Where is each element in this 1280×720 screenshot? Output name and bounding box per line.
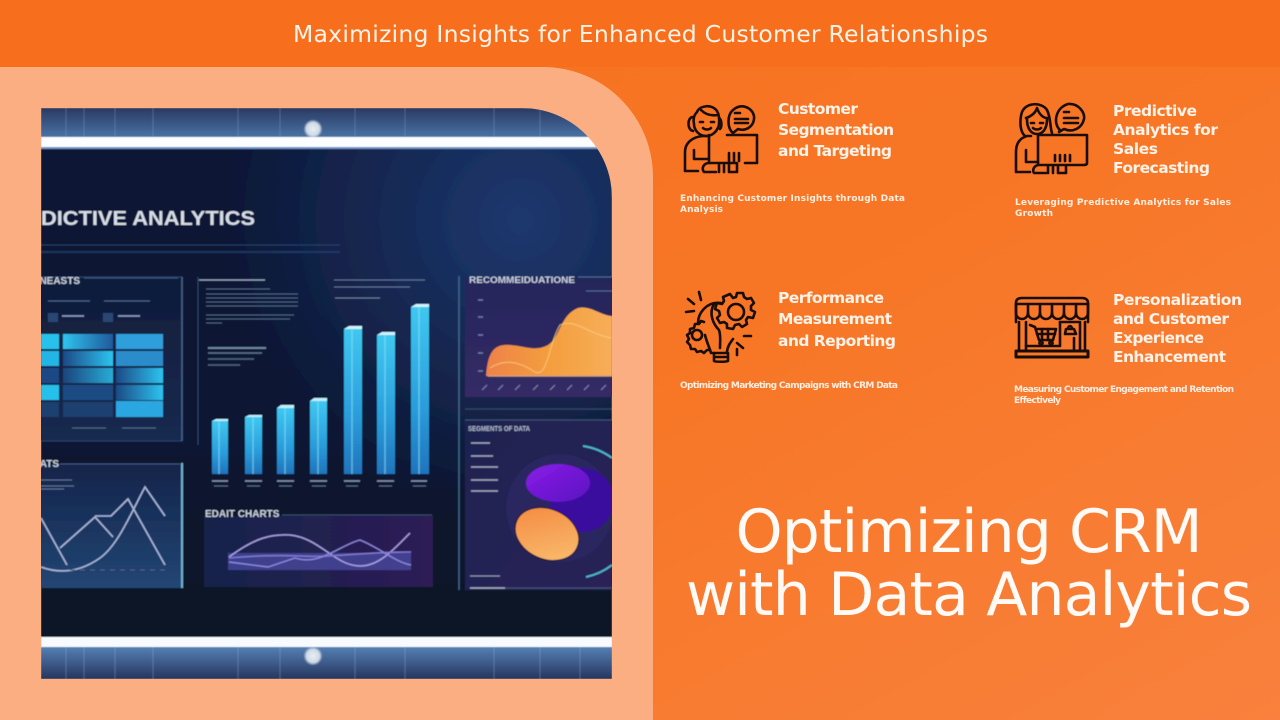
caption: marketing campaigns: Optimizing Marketing Campaigns with CRM Data: [680, 381, 898, 391]
heading: performance measurement: [778, 289, 896, 350]
caption: sales growth: [1015, 198, 1231, 219]
heading: customer segmentation: and Targeting: [778, 142, 892, 160]
wave chart panel: EDAIT CHARTS: [205, 509, 280, 520]
bottom light strip: [41, 637, 612, 679]
caption: customer insights: Analysis: [680, 205, 723, 215]
heading: predictive analytics: Forecasting: [1113, 159, 1210, 177]
forecasts table panel: [30, 276, 182, 441]
main title: with Data Analytics: [686, 560, 1252, 630]
header title: Maximizing Insights for Enhanced Customer Relationships: [293, 20, 988, 48]
forecasts table panel: NEASTS: [39, 276, 80, 287]
dashboard heading: DICTIVE ANALYTICS: [41, 208, 255, 230]
main title: Optimizing CRM: [736, 497, 1202, 567]
heading: predictive analytics: Analytics for: [1113, 121, 1218, 139]
wave chart panel: [204, 509, 433, 587]
recommendations area chart panel: RECOMMEIDUATIONE: [469, 275, 575, 285]
caption: customer insights: [680, 194, 905, 215]
icon: online storefront: [1016, 298, 1088, 357]
heading: performance measurement: and Reporting: [778, 332, 896, 350]
heading: customer segmentation: Segmentation: [778, 121, 894, 139]
text summary block: [198, 277, 298, 445]
heading: predictive analytics: Predictive: [1113, 102, 1197, 120]
line chart panel: [30, 459, 183, 588]
heading: personalization: Enhancement: [1113, 348, 1227, 366]
caption: engagement and retention: Measuring Customer Engagement and Retention: [1014, 385, 1234, 395]
heading: performance measurement: Measurement: [778, 310, 893, 328]
heading: personalization: [1113, 291, 1242, 366]
line chart panel: ATS: [40, 459, 59, 470]
heading: customer segmentation: [778, 100, 894, 160]
header band: [0, 0, 1280, 67]
recommendations area chart panel: [459, 275, 615, 590]
heading: personalization: and Customer: [1113, 310, 1229, 328]
heading: personalization: Personalization: [1113, 291, 1242, 309]
heading: personalization: Experience: [1113, 329, 1204, 347]
donut chart panel: [465, 420, 615, 590]
top light strip: [41, 108, 612, 149]
heading: predictive analytics: Sales: [1113, 140, 1158, 158]
heading: predictive analytics: [1113, 102, 1218, 177]
caption: sales growth: Leveraging Predictive Analytics for Sales: [1015, 198, 1231, 208]
icon: agent with headset: [685, 106, 757, 172]
image backing panel: [0, 67, 653, 720]
donut chart panel: SEGMENTS OF DATA: [468, 426, 530, 433]
bar chart: [212, 280, 429, 486]
heading: customer segmentation: Customer: [778, 100, 858, 118]
dashboard image: [30, 108, 615, 679]
caption: engagement and retention: [1014, 385, 1234, 406]
caption: engagement and retention: Effectively: [1014, 396, 1061, 406]
caption: sales growth: Growth: [1015, 209, 1053, 219]
main title: [686, 497, 1252, 630]
icon: woman at computer: [1016, 104, 1087, 173]
caption: customer insights: Enhancing Customer Insights through Data: [680, 194, 905, 204]
heading: performance measurement: Performance: [778, 289, 884, 307]
icon: gears in light bulb: [686, 292, 755, 362]
